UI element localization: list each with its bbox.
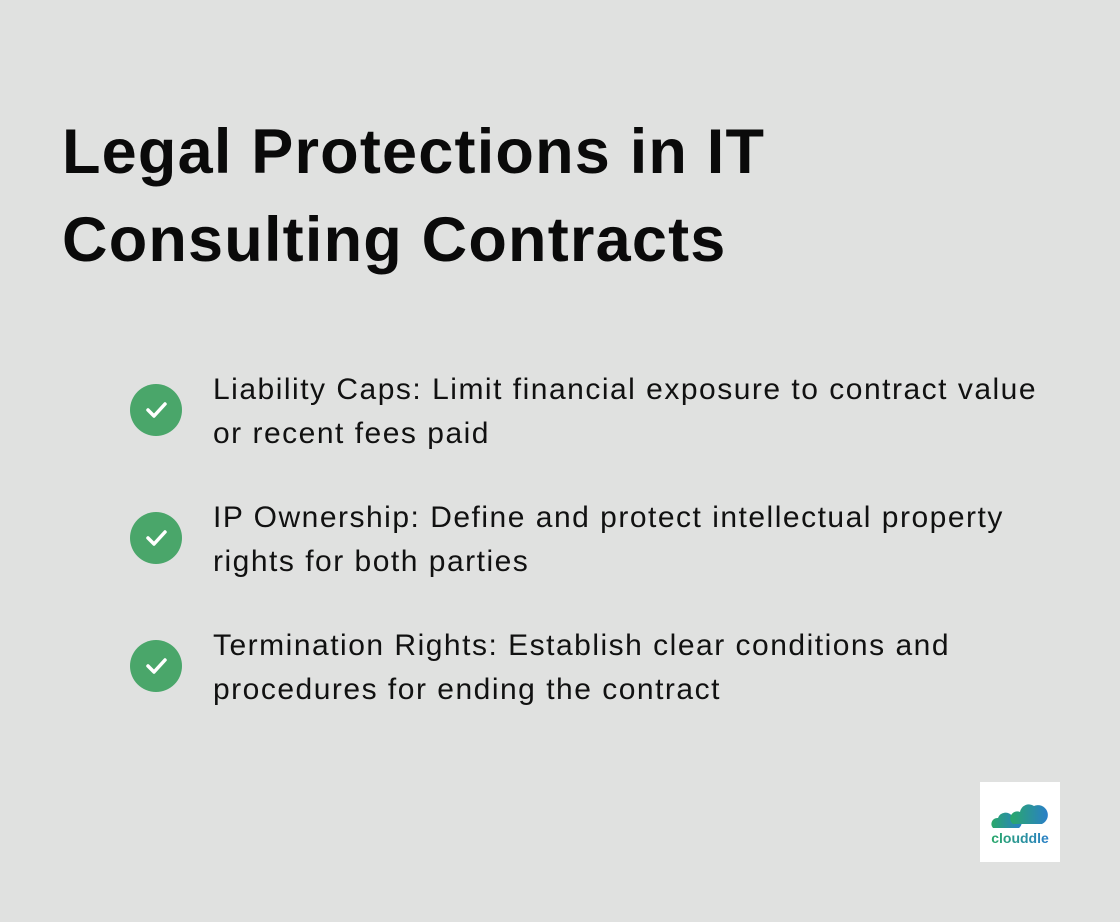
item: liability caps	[130, 373, 1037, 450]
item: termination rights	[130, 629, 950, 706]
text: rights for both parties	[213, 545, 529, 578]
icon: check	[130, 384, 182, 436]
text: IP Ownership: Define and protect intellectual property	[213, 501, 1004, 534]
item: IP ownership	[130, 501, 1004, 578]
text	[213, 501, 1004, 578]
text	[213, 373, 1037, 450]
title: Legal Protections in IT	[62, 117, 765, 187]
text: procedures for ending the contract	[213, 673, 721, 706]
icon: check	[130, 512, 182, 564]
logo: clouddle	[980, 782, 1060, 862]
icon: check	[130, 640, 182, 692]
text: Liability Caps: Limit financial exposure to contract value	[213, 373, 1037, 406]
text: or recent fees paid	[213, 417, 490, 450]
logo: clouddle: clouddle	[991, 830, 1049, 846]
text: Termination Rights: Establish clear conditions and	[213, 629, 950, 662]
title: Consulting Contracts	[62, 205, 726, 275]
title	[62, 117, 765, 275]
text	[213, 629, 950, 706]
